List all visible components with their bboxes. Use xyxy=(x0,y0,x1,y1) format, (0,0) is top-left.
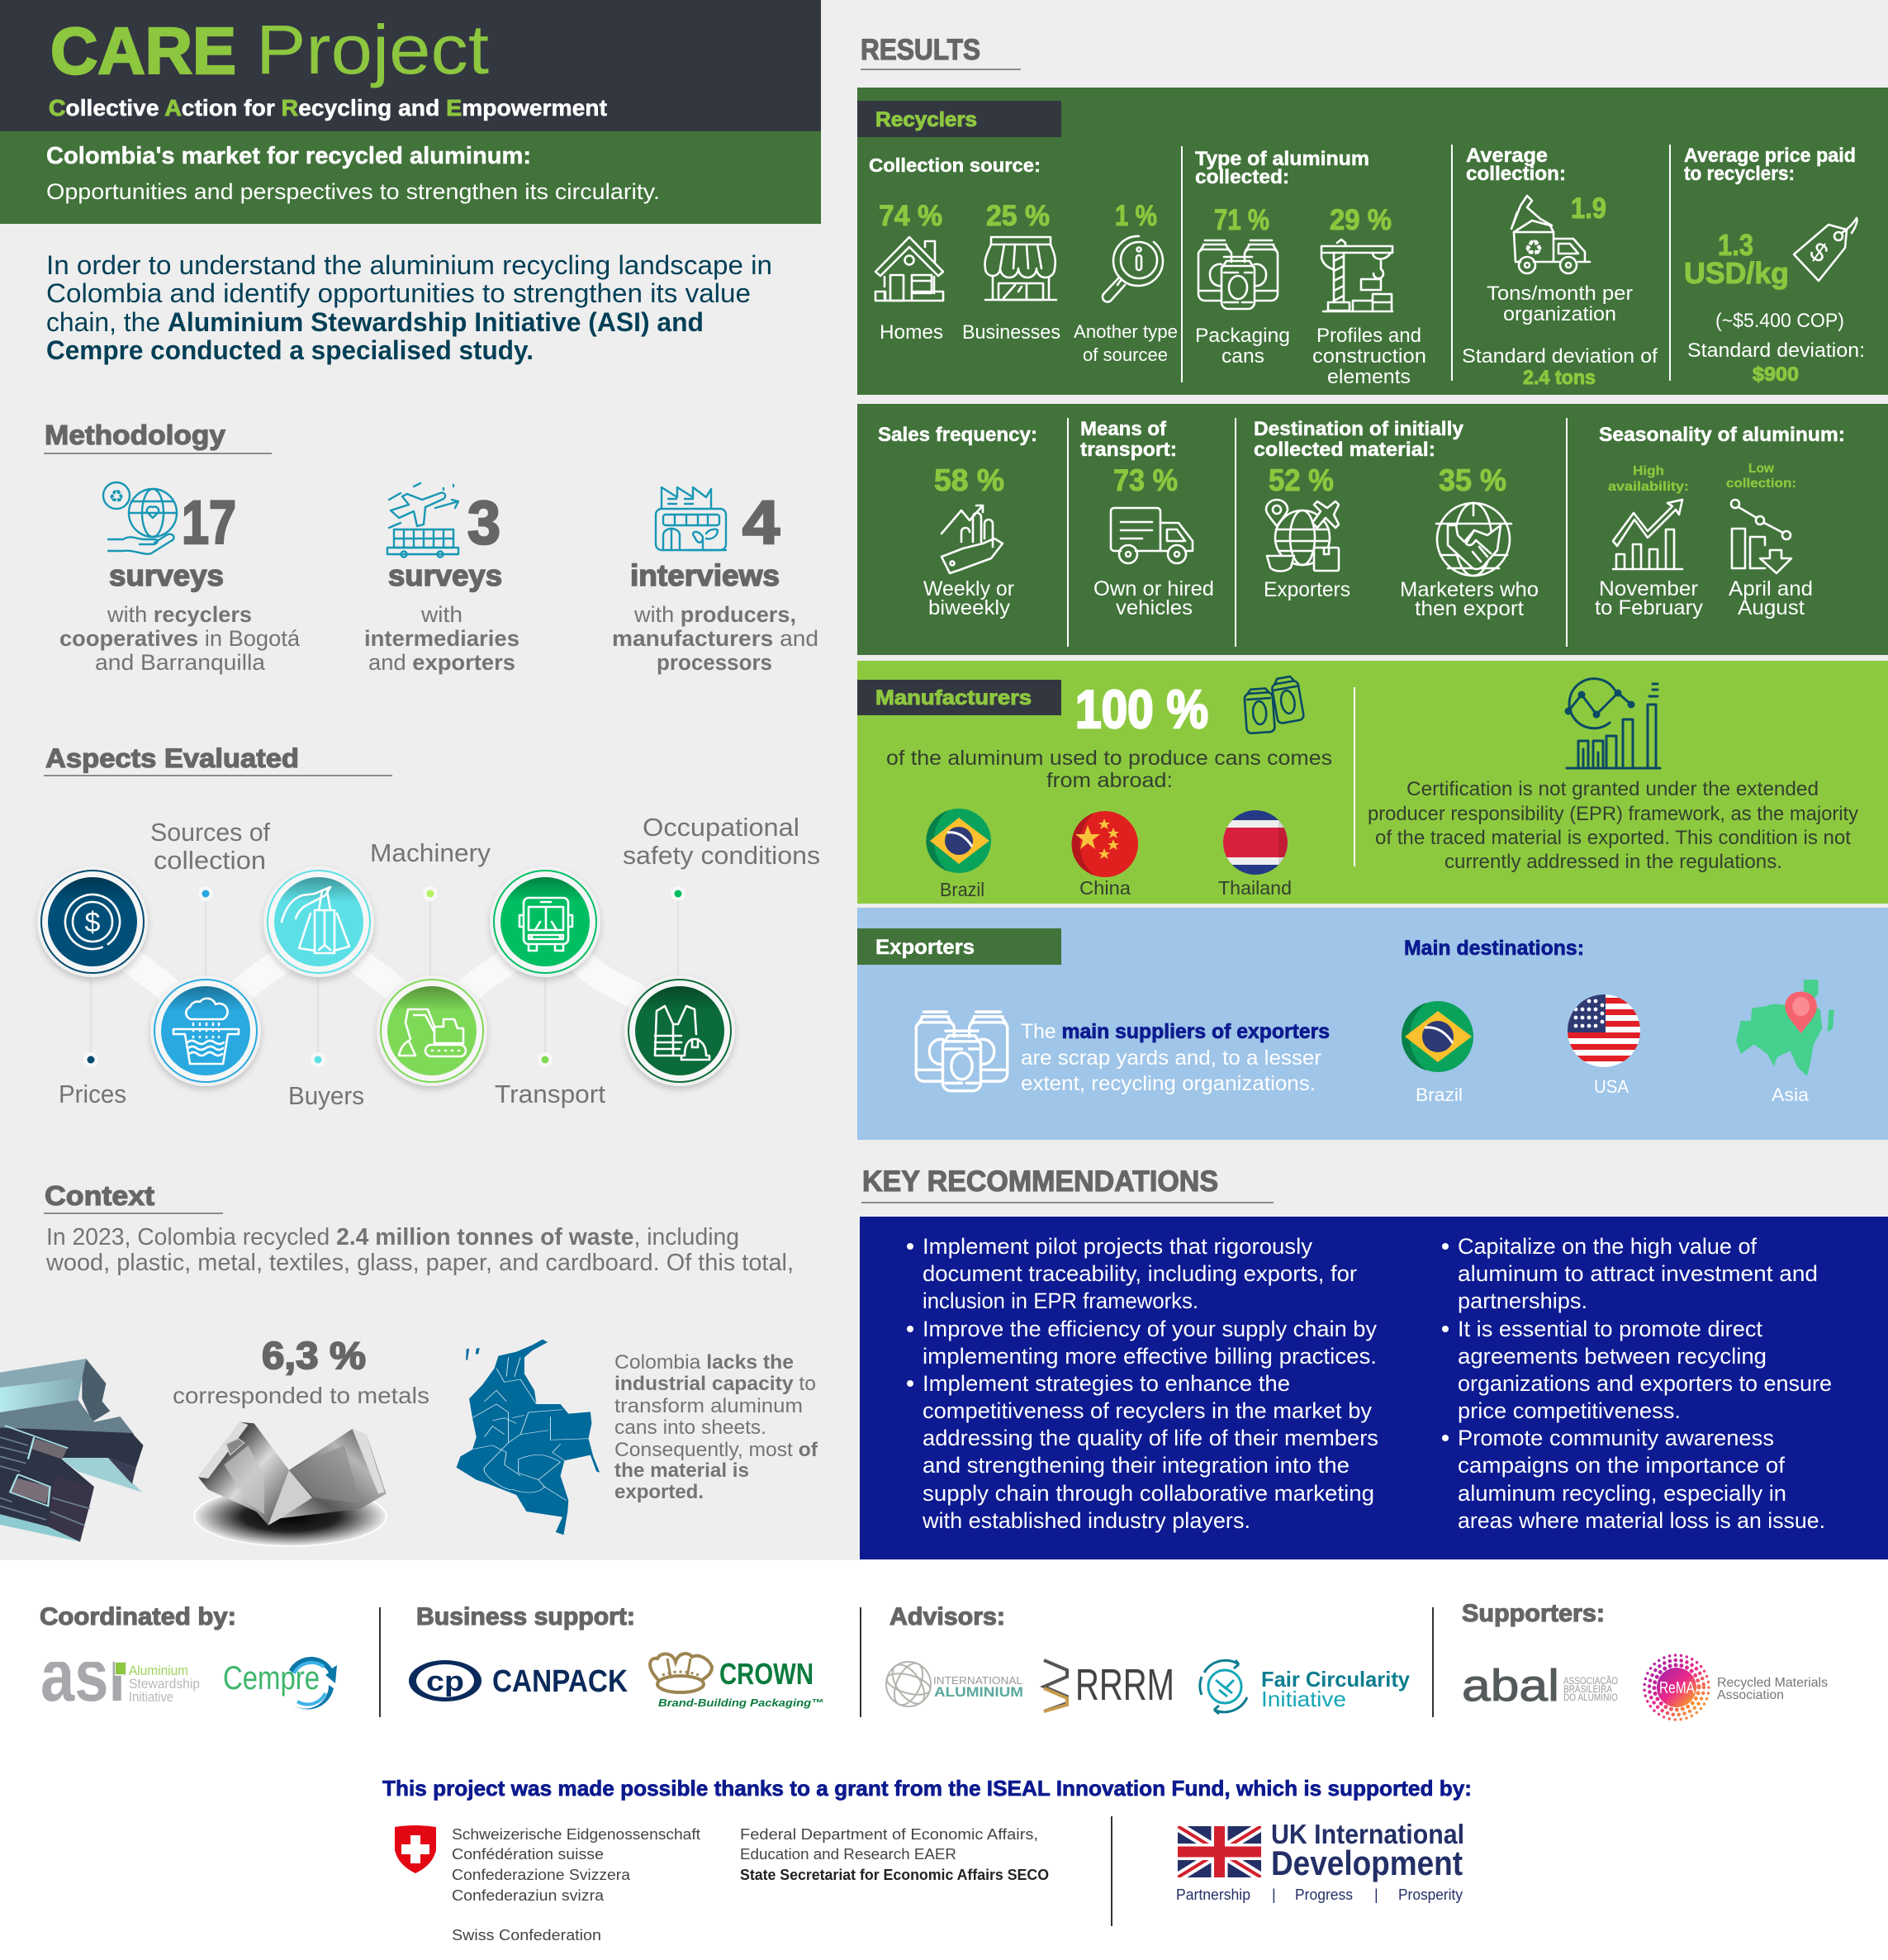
logo: ASI xyxy=(42,1662,200,1701)
item: Sales frequency: Weekly or xyxy=(923,577,1014,600)
item: Average collection: collection: xyxy=(1466,163,1566,185)
item: High availability xyxy=(1595,464,1704,619)
item: Sources of collection: Sources of xyxy=(150,818,270,847)
item: Another type of source 1%: 1 % xyxy=(1115,200,1157,232)
item: Sales frequency: biweekly xyxy=(928,596,1011,619)
flag: Brazil xyxy=(926,809,991,900)
heading: market: Colombia's market for recycled aluminum: xyxy=(46,143,531,169)
heading: Destination of material: Destination of initially xyxy=(1254,418,1464,440)
image: map of Colombia xyxy=(457,1340,600,1535)
item: Average price paid: Standard deviation: xyxy=(1687,339,1865,362)
title: CARE Project: CARE xyxy=(50,14,236,88)
text block: industrial capacity note: the material is xyxy=(614,1459,749,1482)
stat: 6,3 % metals xyxy=(173,1334,429,1408)
logo: CROWN: CROWN xyxy=(719,1657,814,1691)
icon: handshake on globe xyxy=(1436,503,1511,576)
list: right column recommendations: It is essential to promote direct xyxy=(1458,1317,1762,1341)
item: High availability: High xyxy=(1633,464,1664,478)
logo: UK International Development xyxy=(1176,1819,1464,1903)
text: certification note: of the traced material is exported. This condition is not xyxy=(1375,827,1851,849)
logo: ABAL: ASSOCIAÇÃO xyxy=(1563,1675,1618,1687)
item: Exporters 52%: 52 % xyxy=(1269,463,1334,497)
item: Homes 74% xyxy=(875,200,943,344)
item: Businesses 25%: Businesses xyxy=(962,321,1060,344)
text: certification note xyxy=(1368,778,1858,873)
item: Average price paid: 1.3 xyxy=(1718,228,1753,262)
item: Means of transport: transport: xyxy=(1080,439,1177,461)
logo: Fair Circularity Initiative: Initiative xyxy=(1261,1687,1346,1711)
logo: UK International Development: Progress xyxy=(1295,1886,1353,1903)
logo: UK International Development: Prosperity xyxy=(1398,1886,1463,1903)
item: Buyers: Buyers xyxy=(288,1081,364,1110)
label: surveys: surveys xyxy=(388,558,502,592)
panel: business support: Business support: xyxy=(416,1603,635,1630)
item: Low collection: April and xyxy=(1729,577,1813,600)
text: intermediaries description xyxy=(364,602,519,675)
heading: Destination of material xyxy=(1254,418,1464,461)
tab: Exporters: Exporters xyxy=(875,936,975,959)
item: Means of transport xyxy=(1080,418,1214,619)
list: right column recommendations: Capitalize on the high value of xyxy=(1458,1234,1757,1259)
item: Prices: Prices xyxy=(59,1080,126,1108)
text: grant acknowledgement: This project was made possible thanks to a grant from the ISEAL Innovation Fund, which is supported by: xyxy=(382,1776,1472,1801)
stat: 6,3 % metals: corresponded to metals xyxy=(173,1383,429,1408)
text: producers description xyxy=(612,602,818,675)
logo: Swiss Confederation: Confederaziun svizra xyxy=(452,1887,605,1904)
text block: introduction xyxy=(46,250,772,365)
heading: Type of aluminum collected: collected: xyxy=(1195,166,1289,188)
logo: Swiss Confederation: State Secretariat for Economic Affairs SECO xyxy=(740,1867,1049,1883)
panel: methodology surveys with recyclers xyxy=(59,482,301,675)
item: Means of transport: vehicles xyxy=(1116,596,1193,619)
text block: context: wood, plastic, metal, textiles, glass, paper, and cardboard. Of this total, xyxy=(45,1250,794,1276)
icon: globe with pin, plane and box xyxy=(1266,500,1339,572)
list: left column recommendations: Implement strategies to enhance the xyxy=(923,1371,1290,1396)
item: Average price paid: USD/kg xyxy=(1684,256,1789,290)
item: Profiles 29%: Profiles and xyxy=(1316,325,1421,347)
panel: coordinated by: Coordinated by: xyxy=(40,1603,236,1630)
text: producers description: processors xyxy=(657,650,772,675)
panel: manufacturers xyxy=(857,661,1888,904)
text block: industrial capacity note: industrial capacity to xyxy=(614,1373,816,1395)
label: interviews: interviews xyxy=(630,558,780,592)
item: Average collection: Average xyxy=(1466,145,1548,167)
list: right column recommendations: partnerships. xyxy=(1458,1288,1587,1313)
logo: Swiss Confederation: Confederazione Svizzera xyxy=(452,1867,631,1883)
image: aluminium profiles xyxy=(0,1359,144,1542)
icon: hand with rising chart xyxy=(942,505,1003,573)
logo: UK International Development: | xyxy=(1374,1886,1378,1903)
list: left column recommendations: Improve the efficiency of your supply chain by xyxy=(923,1317,1377,1341)
logo: Cempre: Cempre xyxy=(223,1660,320,1697)
item: Means of transport: 73 % xyxy=(1113,463,1178,497)
icon: globe in hand with recycling: ♻ xyxy=(109,486,124,506)
list: right column recommendations: price competitiveness. xyxy=(1458,1398,1681,1423)
chart: aspects evaluated chain xyxy=(37,813,820,1110)
flag: China xyxy=(1071,811,1138,899)
item: Average price paid: to recyclers: xyxy=(1684,163,1795,185)
item: Prices xyxy=(37,866,148,1108)
heading: Seasonality: Seasonality of aluminum: xyxy=(1599,424,1845,446)
flag: Brazil destination xyxy=(1402,1001,1473,1105)
logo: Swiss Confederation: Federal Department of Economic Affairs, xyxy=(740,1826,1038,1843)
number: 17: 17 xyxy=(182,488,236,557)
heading: Destination of material: collected material: xyxy=(1254,439,1435,461)
text block: introduction: Colombia and identify opportunities to strengthen its value xyxy=(46,278,751,308)
item: Low collection: August xyxy=(1738,596,1805,619)
item: Average collection: 2.4 tons xyxy=(1523,367,1596,389)
flag: China: China xyxy=(1079,877,1131,899)
item: Packaging cans 71%: cans xyxy=(1222,345,1264,368)
heading: Type of aluminum collected xyxy=(1195,148,1369,188)
heading: KEY RECOMMENDATIONS: KEY RECOMMENDATIONS xyxy=(862,1165,1218,1198)
text block: industrial capacity note: Colombia lacks the xyxy=(614,1351,794,1374)
flag: Thailand xyxy=(1218,809,1292,899)
icon: decline chart xyxy=(1731,500,1791,573)
image: crushed aluminium can xyxy=(194,1422,387,1546)
icon: Asia map with pin: Asia xyxy=(1772,1084,1810,1105)
text: producers description: manufacturers and xyxy=(612,626,818,651)
icon: price tag xyxy=(1794,218,1857,281)
text block: introduction: Cempre conducted a specialised study. xyxy=(46,335,534,365)
logo: Swiss Confederation: Swiss Confederation xyxy=(452,1927,601,1943)
logo: UK International Development: Partnership xyxy=(1176,1886,1250,1903)
icon: certification chart xyxy=(1566,679,1660,768)
text: intermediaries description: and exporters xyxy=(368,650,515,675)
text block: industrial capacity note: cans into sheets. xyxy=(614,1417,766,1439)
item: Low collection xyxy=(1726,462,1813,619)
item: High availability: availability: xyxy=(1608,480,1689,494)
item: High availability: to February xyxy=(1595,596,1704,619)
logo: RRRM: RRRM xyxy=(1075,1660,1174,1710)
item: Marketers 35%: 35 % xyxy=(1439,463,1506,497)
logo: Swiss Confederation: Confédération suisse xyxy=(452,1846,604,1863)
text: main suppliers: are scrap yards and, to a lesser xyxy=(1021,1046,1321,1070)
list: right column recommendations: areas where material loss is an issue. xyxy=(1458,1508,1825,1533)
text: intermediaries description: with xyxy=(420,602,463,627)
item: Occupational safety conditions xyxy=(623,813,820,1086)
item: Marketers 35% xyxy=(1400,463,1539,620)
text block: industrial capacity note: exported. xyxy=(614,1481,704,1503)
tab: Exporters xyxy=(857,928,1061,965)
icon: plane and cargo xyxy=(387,483,458,557)
logo: RRRM xyxy=(1044,1660,1174,1711)
logo: UK International Development: UK International xyxy=(1271,1819,1464,1849)
panel: recyclers top xyxy=(857,88,1888,395)
number: 4: 4 xyxy=(742,488,780,557)
text: certification note: Certification is not granted under the extended xyxy=(1407,778,1819,800)
item: Average collection xyxy=(1462,145,1658,389)
item: Prices: $ xyxy=(85,907,101,938)
heading: Type of aluminum collected: Type of aluminum xyxy=(1195,148,1369,170)
list: right column recommendations: aluminum recycling, especially in xyxy=(1458,1481,1786,1506)
item: Means of transport: Means of xyxy=(1080,418,1167,440)
flag: Brazil: Brazil xyxy=(940,879,984,900)
label: surveys: surveys xyxy=(109,558,224,592)
item: Sales frequency xyxy=(878,424,1037,619)
item: Another type of source 1% xyxy=(1074,200,1178,365)
panel: methodology surveys with intermediaries xyxy=(364,483,519,675)
logo: UK International Development: | xyxy=(1272,1886,1276,1903)
icon: cans xyxy=(1198,240,1278,309)
text block: context: In 2023, Colombia recycled 2.4 million tonnes of waste, including xyxy=(46,1224,739,1251)
icon: white cans xyxy=(916,1012,1008,1091)
panel: green subtitle band xyxy=(0,131,821,224)
item: Average collection: organization xyxy=(1503,303,1616,325)
item: Average collection: Tons/month per xyxy=(1487,282,1633,305)
logo: ASI: Stewardship xyxy=(129,1676,200,1692)
panel: title header xyxy=(0,0,821,131)
heading: Main destinations: Main destinations: xyxy=(1404,937,1584,960)
logo: International Aluminium: INTERNATIONAL xyxy=(933,1674,1022,1687)
item: Average price paid: $900 xyxy=(1753,363,1799,386)
logo: ReMA: ReMA xyxy=(1659,1679,1696,1697)
item: Means of transport: Own or hired xyxy=(1093,577,1214,600)
item: Sources of collection: collection xyxy=(154,846,266,875)
item: Marketers 35%: Marketers who xyxy=(1400,578,1539,601)
item: Profiles 29%: construction xyxy=(1312,345,1426,368)
item: Average price paid xyxy=(1684,145,1865,386)
panel: key recommendations xyxy=(860,1217,1888,1559)
panel: exporters xyxy=(857,908,1888,1140)
text block: introduction: In order to understand the aluminium recycling landscape in xyxy=(46,250,772,280)
heading: RESULTS: RESULTS xyxy=(861,34,980,66)
text: producers description: with producers, xyxy=(633,602,796,627)
logo: ABAL xyxy=(1462,1661,1618,1711)
item: Profiles 29% xyxy=(1312,204,1426,388)
item: Average price paid: Average price paid xyxy=(1684,145,1856,167)
panel: methodology interviews xyxy=(612,487,818,675)
logo: Cempre xyxy=(223,1657,337,1710)
icon: crane xyxy=(1321,240,1392,311)
item: Sales frequency: 58 % xyxy=(934,463,1004,497)
list: left column recommendations: document traceability, including exports, for xyxy=(923,1261,1357,1286)
item: Profiles 29%: elements xyxy=(1327,366,1411,388)
item: Transport xyxy=(490,866,605,1108)
text block: industrial capacity note: transform aluminum xyxy=(614,1395,803,1417)
item: Profiles 29%: 29 % xyxy=(1330,204,1392,236)
icon: delivery truck xyxy=(1111,508,1193,563)
list: right column recommendations: organizations and exporters to ensure xyxy=(1458,1371,1832,1396)
item: Packaging cans 71%: Packaging xyxy=(1195,325,1290,347)
panel: business support xyxy=(409,1603,823,1709)
icon: tilted cans xyxy=(1244,676,1304,733)
flag: Thailand: Thailand xyxy=(1218,877,1292,899)
list: left column recommendations: inclusion in EPR frameworks. xyxy=(923,1288,1198,1313)
logo: ABAL: abal xyxy=(1462,1661,1559,1711)
list: right column recommendations: aluminum to attract investment and xyxy=(1458,1261,1818,1286)
list: left column recommendations: and strengthening their integration into the xyxy=(923,1453,1350,1478)
logo: Swiss Confederation: Education and Research EAER xyxy=(740,1846,956,1863)
item: Packaging cans 71% xyxy=(1195,204,1290,368)
text: recyclers description: and Barranquilla xyxy=(95,650,266,675)
heading: Context: Context xyxy=(45,1180,154,1211)
list: right column recommendations xyxy=(1442,1234,1832,1533)
icon: union flag xyxy=(1178,1826,1261,1877)
list: right column recommendations: campaigns on the importance of xyxy=(1458,1453,1786,1478)
number: 3: 3 xyxy=(467,488,500,557)
flag: USA: USA xyxy=(1594,1076,1629,1097)
logo: CANPACK xyxy=(409,1660,628,1701)
heading: Methodology: Methodology xyxy=(45,420,226,450)
list: left column recommendations: competitiveness of recyclers in the market by xyxy=(923,1398,1372,1423)
item: Sales frequency: Sales frequency: xyxy=(878,424,1037,446)
item: Average price paid: (~$5.400 COP) xyxy=(1715,310,1844,332)
list: left column recommendations: Implement pilot projects that rigorously xyxy=(923,1234,1312,1259)
tab: Manufacturers xyxy=(857,680,1061,715)
item: Exporters 52% xyxy=(1264,463,1350,601)
logo: Swiss Confederation xyxy=(395,1825,1049,1943)
item: Homes 74%: 74 % xyxy=(879,200,942,232)
item: Another type of source 1%: Another type xyxy=(1074,321,1178,342)
panel: supporters xyxy=(1462,1600,1828,1720)
item: Homes 74%: Homes xyxy=(880,321,943,344)
text: certification note: producer responsibility (EPR) framework, as the majority xyxy=(1368,803,1858,825)
tab: Recyclers: Recyclers xyxy=(875,108,977,131)
list: left column recommendations xyxy=(907,1234,1378,1533)
text block: industrial capacity note xyxy=(614,1351,818,1503)
list: right column recommendations: agreements between recycling xyxy=(1458,1344,1767,1369)
item: Packaging cans 71%: 71 % xyxy=(1214,204,1269,236)
list: left column recommendations: addressing the quality of life of their members xyxy=(923,1426,1378,1450)
item: Buyers xyxy=(263,866,374,1110)
logo: International Aluminium: ALUMINIUM xyxy=(934,1684,1023,1700)
item: Businesses 25%: 25 % xyxy=(986,200,1050,232)
text: opportunities: Opportunities and perspectives to strengthen its circularity. xyxy=(46,179,660,204)
stat: 100 %: 100 % xyxy=(1075,679,1208,739)
logo: CROWN: Brand-Building Packaging™ xyxy=(658,1697,823,1709)
text: recyclers description: with recyclers xyxy=(107,602,252,627)
logo: ASI: asi xyxy=(40,1635,126,1717)
logo: ReMA: Recycled Materials xyxy=(1717,1676,1828,1690)
list: left column recommendations: supply chain through collaborative marketing xyxy=(923,1481,1374,1506)
icon: Asia map with pin xyxy=(1736,980,1834,1105)
icon: growth chart xyxy=(1613,500,1682,569)
panel: recyclers bottom xyxy=(857,404,1888,655)
panel: coordinated by xyxy=(40,1603,337,1717)
icon: globe in hand with recycling xyxy=(103,482,177,554)
title: CARE Project xyxy=(50,11,489,88)
text: aluminum from abroad: of the aluminum used to produce cans comes xyxy=(886,747,1332,770)
list: left column recommendations: with established industry players. xyxy=(922,1508,1250,1533)
tab: Recyclers xyxy=(857,101,1061,137)
list: left column recommendations: implementing more effective billing practices. xyxy=(923,1344,1377,1369)
item: Average collection: 1.9 xyxy=(1571,192,1606,225)
item: High availability: November xyxy=(1599,577,1698,600)
text: certification note: currently addressed in the regulations. xyxy=(1444,851,1782,873)
title: CARE Project: Project xyxy=(256,11,489,88)
panel: supporters: Supporters: xyxy=(1462,1600,1605,1627)
item: Sources of collection xyxy=(150,818,270,1086)
icon: factory and store xyxy=(656,487,726,550)
icon: recycling truck xyxy=(1511,196,1590,273)
item: Low collection: collection: xyxy=(1726,477,1796,491)
text: aluminum from abroad xyxy=(886,747,1332,792)
logo: CANPACK: CANPACK xyxy=(492,1664,628,1699)
text block: introduction: chain, the Aluminium Stewardship Initiative (ASI) and xyxy=(46,307,704,337)
text: intermediaries description: intermediaries xyxy=(364,626,519,651)
text: main suppliers xyxy=(1021,1020,1330,1095)
logo: UK International Development: Development xyxy=(1271,1844,1463,1882)
logo: Fair Circularity Initiative xyxy=(1200,1660,1411,1714)
item: Machinery xyxy=(370,838,491,1086)
icon: price tag: $ xyxy=(1805,235,1833,268)
text: main suppliers: The main suppliers of exporters xyxy=(1021,1020,1330,1043)
logo: Fair Circularity Initiative: Fair Circularity xyxy=(1261,1667,1411,1692)
logo: CROWN xyxy=(650,1654,823,1709)
item: Another type of source 1%: of sourcee xyxy=(1083,344,1168,365)
logo: ASI: Initiative xyxy=(129,1689,173,1705)
text: recyclers description: cooperatives in Bogotá xyxy=(59,626,301,651)
item: Businesses 25% xyxy=(962,200,1060,344)
panel: advisors xyxy=(885,1603,1411,1714)
text block: context xyxy=(45,1224,794,1276)
logo: ReMA: Association xyxy=(1717,1688,1784,1702)
flag: Brazil destination: Brazil xyxy=(1416,1084,1463,1105)
item: Occupational safety conditions: Occupational xyxy=(643,813,799,842)
item: Occupational safety conditions: safety conditions xyxy=(623,841,820,870)
logo: CANPACK: cp xyxy=(426,1666,464,1697)
text block: industrial capacity note: Consequently, most of xyxy=(614,1439,818,1461)
logo: Swiss Confederation: Schweizerische Eidgenossenschaft xyxy=(452,1826,700,1843)
flag: USA xyxy=(1568,994,1640,1097)
text: recyclers description xyxy=(59,602,301,675)
item: Marketers 35%: then export xyxy=(1415,597,1524,620)
logo: ASI: Aluminium xyxy=(129,1663,188,1678)
heading: Aspects Evaluated: Aspects Evaluated xyxy=(45,743,299,773)
item: Machinery: Machinery xyxy=(370,838,491,867)
logo: ABAL: DO ALUMÍNIO xyxy=(1563,1691,1618,1703)
logo: ABAL: BRASILEIRA xyxy=(1563,1683,1612,1695)
heading: Collection source: Collection source: xyxy=(869,154,1041,176)
item: Transport: Transport xyxy=(495,1080,605,1108)
subtitle: expanded acronym: Collective Action for Recycling and Empowerment xyxy=(49,95,607,121)
item: Exporters 52%: Exporters xyxy=(1264,578,1350,601)
text: main suppliers: extent, recycling organizations. xyxy=(1021,1072,1316,1095)
stat: 6,3 % metals: 6,3 % xyxy=(262,1334,366,1377)
panel: advisors: Advisors: xyxy=(889,1603,1005,1630)
item: Average collection: Standard deviation of xyxy=(1462,345,1658,368)
tab: Manufacturers: Manufacturers xyxy=(875,686,1032,709)
icon: recycling truck: ♻ xyxy=(1524,236,1544,261)
logo: International Aluminium xyxy=(885,1659,1023,1709)
text: aluminum from abroad: from abroad: xyxy=(1046,769,1173,792)
logo: ReMA xyxy=(1644,1655,1828,1720)
list: right column recommendations: Promote community awareness xyxy=(1458,1426,1774,1450)
item: Low collection: Low xyxy=(1748,462,1775,476)
